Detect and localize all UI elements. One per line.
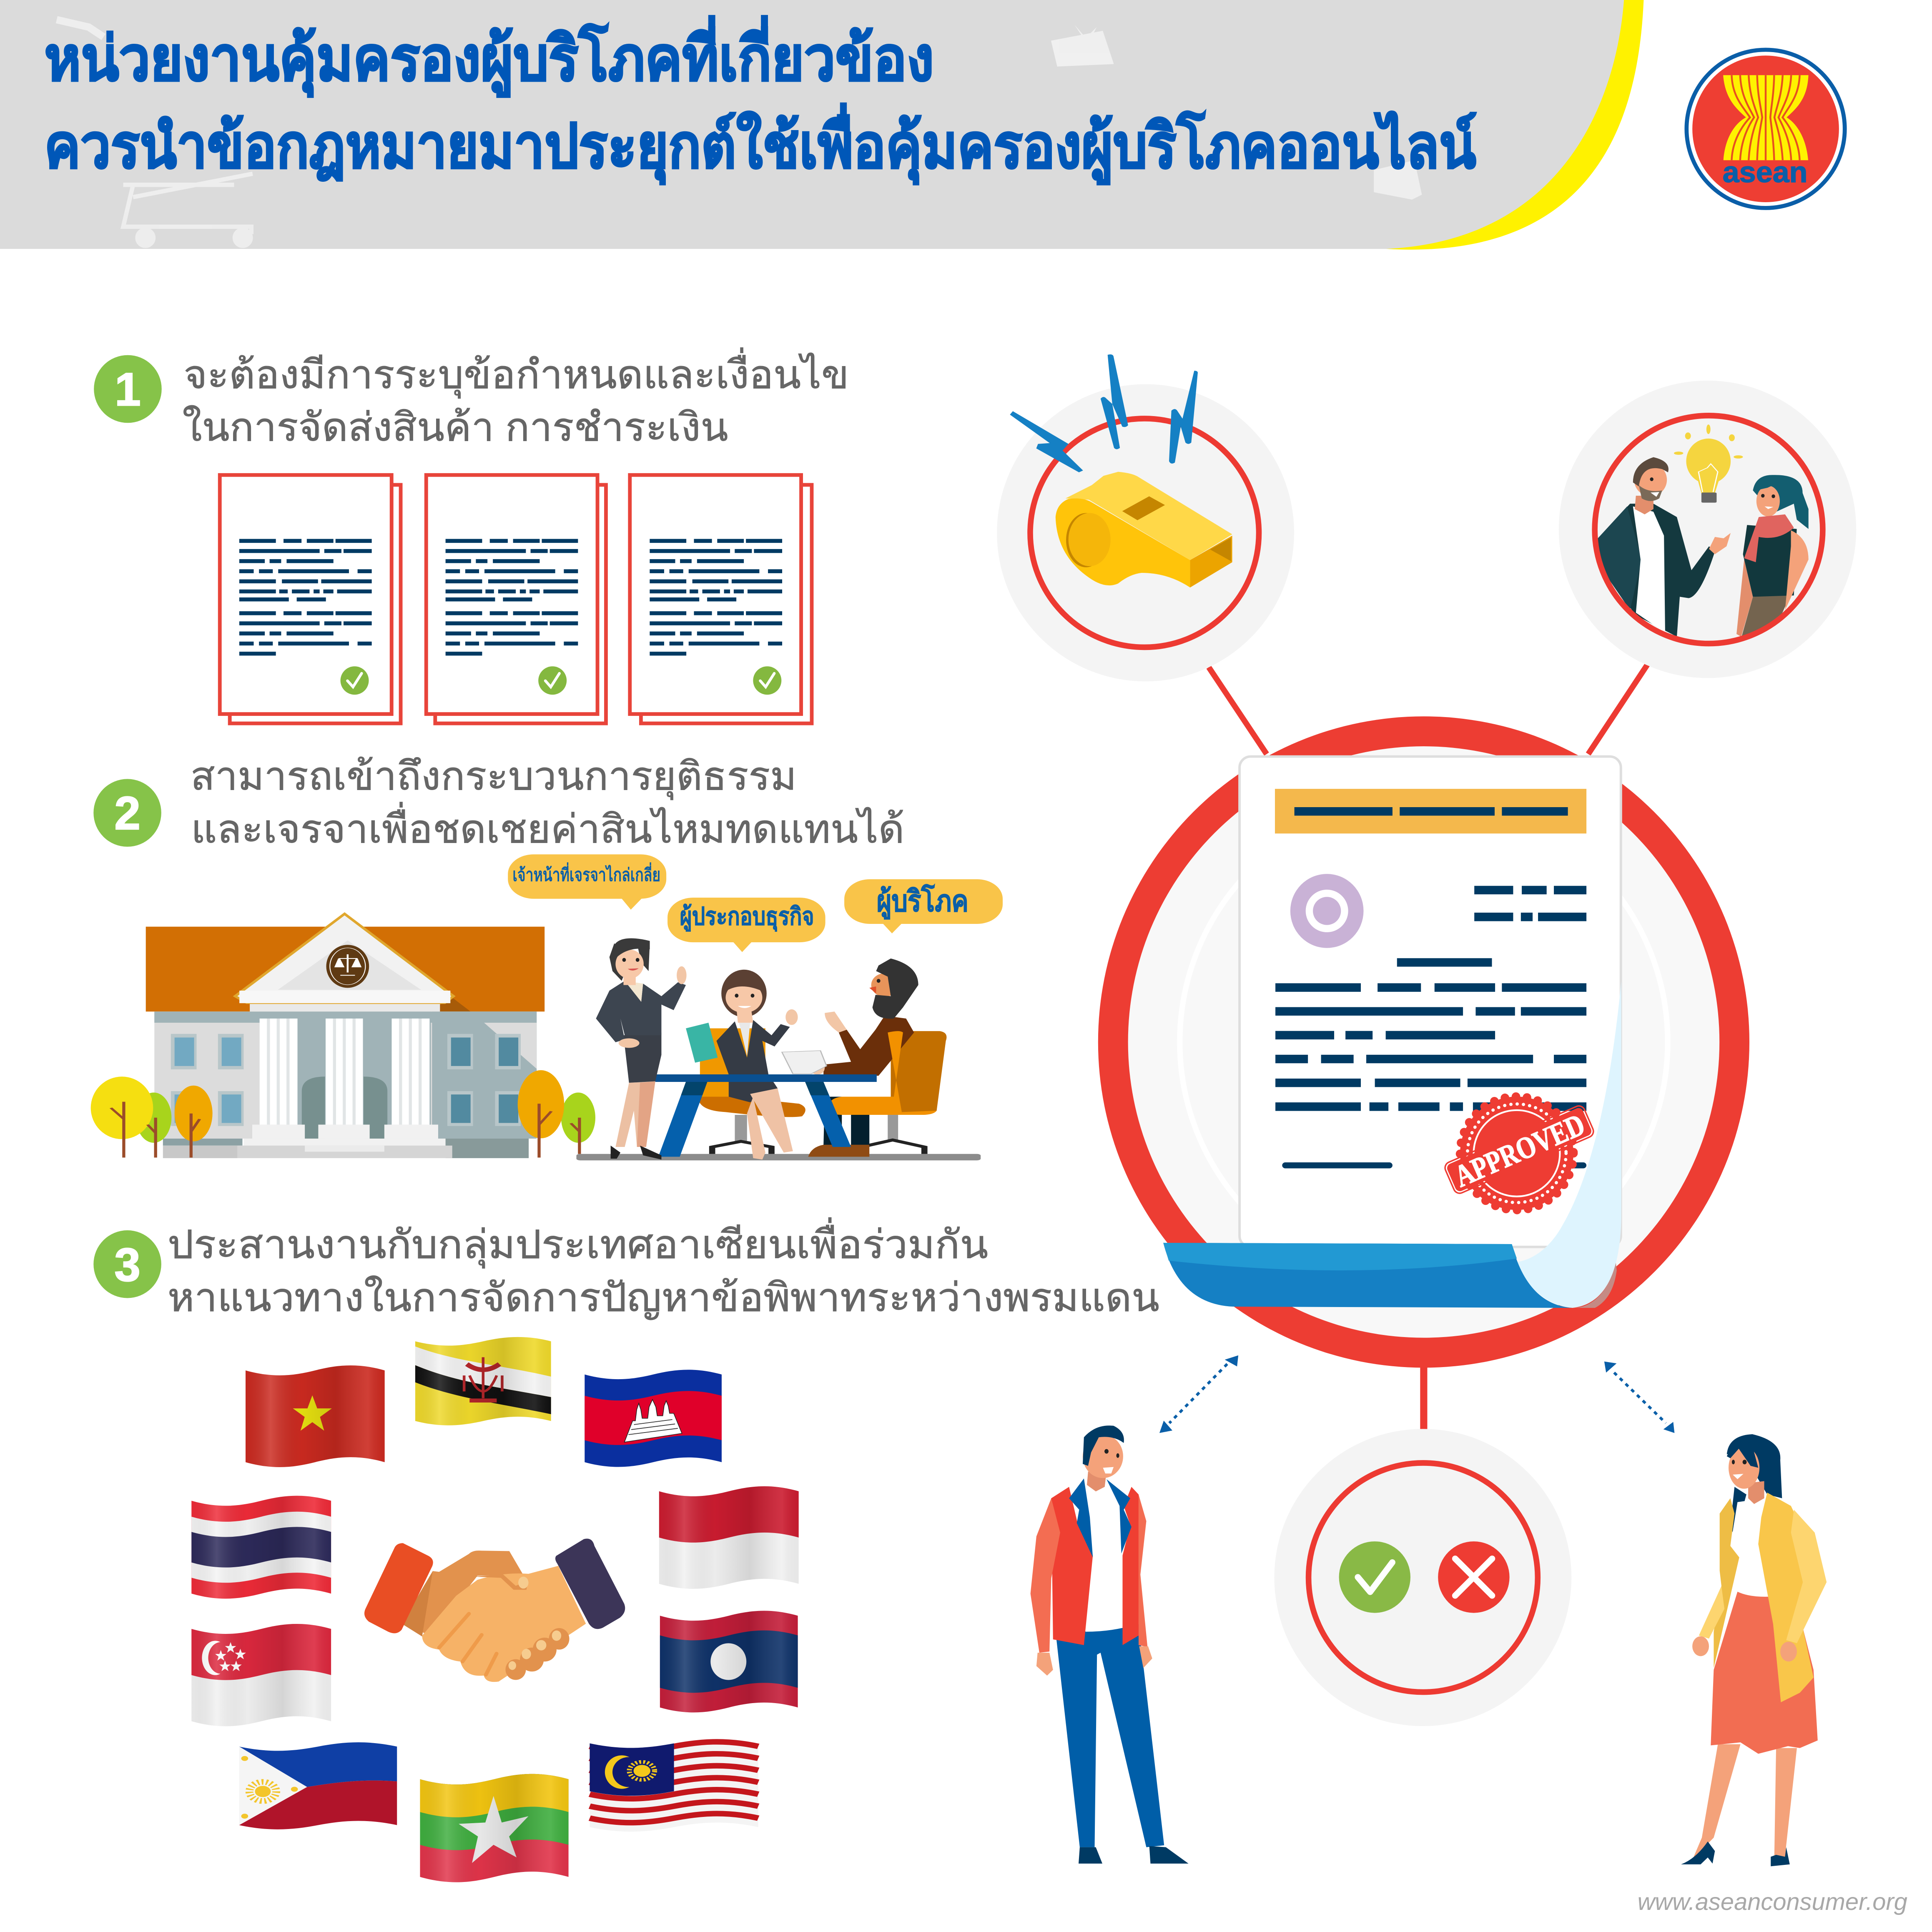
illustration: mediation meeting [577,938,981,1160]
panel: discussion circle [1559,381,1856,678]
flag: Philippines [239,1742,397,1829]
title: ควรนำข้อกฎหมายมาประยุกต์ใช้เพื่อคุ้มครองผู้บริโภคออนไลน์ [44,103,1476,185]
footer url: www.aseanconsumer.org [1638,1889,1907,1915]
panel: whistle circle [997,354,1294,681]
text: point 3: ประสานงานกับกลุ่มประเทศอาเซียนเพื่อร่วมกัน [168,1217,988,1268]
number badge 1: 1 [115,363,141,415]
text: point 1: ในการจัดส่งสินค้า การชำระเงิน [182,405,728,449]
number badge 3: 3 [114,1238,141,1291]
icon: whistle [1056,472,1232,587]
section 3 [93,1217,1159,1882]
illustration: man, woman and light bulb [1598,424,1809,638]
connector lines to centre [1209,665,1647,1429]
person: woman standing [1681,1434,1827,1866]
number badge 2: 2 [114,787,141,839]
icon: ghost gift right [1374,160,1422,200]
document 2 [426,475,606,723]
number badge 1 [94,355,162,423]
text: point 3 [168,1217,1159,1320]
paper [1239,757,1621,1247]
flag: Vietnam [246,1365,385,1467]
floor [577,1154,981,1160]
text: point 3: หาแนวทางในการจัดการปัญหาข้อพิพาทระหว่างพรมแดน [168,1276,1159,1320]
person: standing woman [596,938,687,1159]
bubble: consumer [844,879,1003,933]
chair: man [861,1031,946,1154]
person: seated woman [686,970,827,1159]
flag: Laos [660,1611,798,1712]
section 2 [91,754,1003,1160]
bubble: mediator: เจ้าหน้าที่เจรจาไกล่เกลี่ย [512,862,660,885]
header banner [0,0,1643,250]
icon: red cross [1438,1541,1510,1613]
flag: Singapore [191,1624,331,1726]
panel: approved document [1098,716,1749,1367]
bubble: mediator [508,854,666,910]
arrow: right double-headed dotted [1604,1362,1674,1433]
flag: Myanmar [420,1774,569,1882]
flag: Indonesia [659,1486,799,1589]
blue page curl [1163,981,1621,1308]
flag: Cambodia [585,1370,722,1467]
bubble: consumer: ผู้บริโภค [877,883,969,919]
illustration: trees [91,1070,595,1158]
number badge 2 [93,779,161,847]
table [655,1074,877,1157]
stamp: approved: APPROVED [1450,1107,1590,1194]
section 1 [94,348,849,723]
icon: handshake [364,1538,625,1682]
bubble: business operator: ผู้ประกอบธุรกิจ [680,902,814,932]
icon: ASEAN logo [1686,50,1845,208]
text: point 2 [191,754,904,851]
bubble: business operator [667,898,825,952]
flag: Brunei [415,1337,551,1425]
person: man standing [1031,1425,1189,1864]
arrow: left double-headed dotted [1159,1355,1238,1433]
flag: Thailand [191,1496,331,1598]
flag: Malaysia [590,1739,758,1832]
text: point 1 [182,348,849,449]
icon: green check [1339,1541,1410,1613]
number badge 3 [93,1230,161,1298]
icon: ASEAN logo: asean [1723,156,1808,189]
document 3 [630,475,812,723]
illustration: court building [146,914,544,1158]
ring: large red circle [1098,716,1749,1367]
text: point 2: สามารถเข้าถึงกระบวนการยุติธรรม [191,754,797,800]
icon: ghost gift top [1051,25,1114,67]
text: point 1: จะต้องมีการระบุข้อกำหนดและเงื่อนไข [183,348,849,399]
chair: seated woman [698,1028,805,1154]
panel: approve or reject circle [1274,1429,1571,1726]
icon: ghost shopping cart [57,20,253,246]
text: point 2: และเจรจาเพื่อชดเชยค่าสินไหมทดแทนได้ [191,802,904,851]
title: หน่วยงานคุ้มครองผู้บริโภคที่เกี่ยวข้อง [44,15,934,97]
title [44,15,1476,185]
person: man consumer [808,958,937,1157]
document 1 [220,475,401,723]
icon: lightning bolts [1010,354,1198,472]
document content [1275,789,1586,1165]
